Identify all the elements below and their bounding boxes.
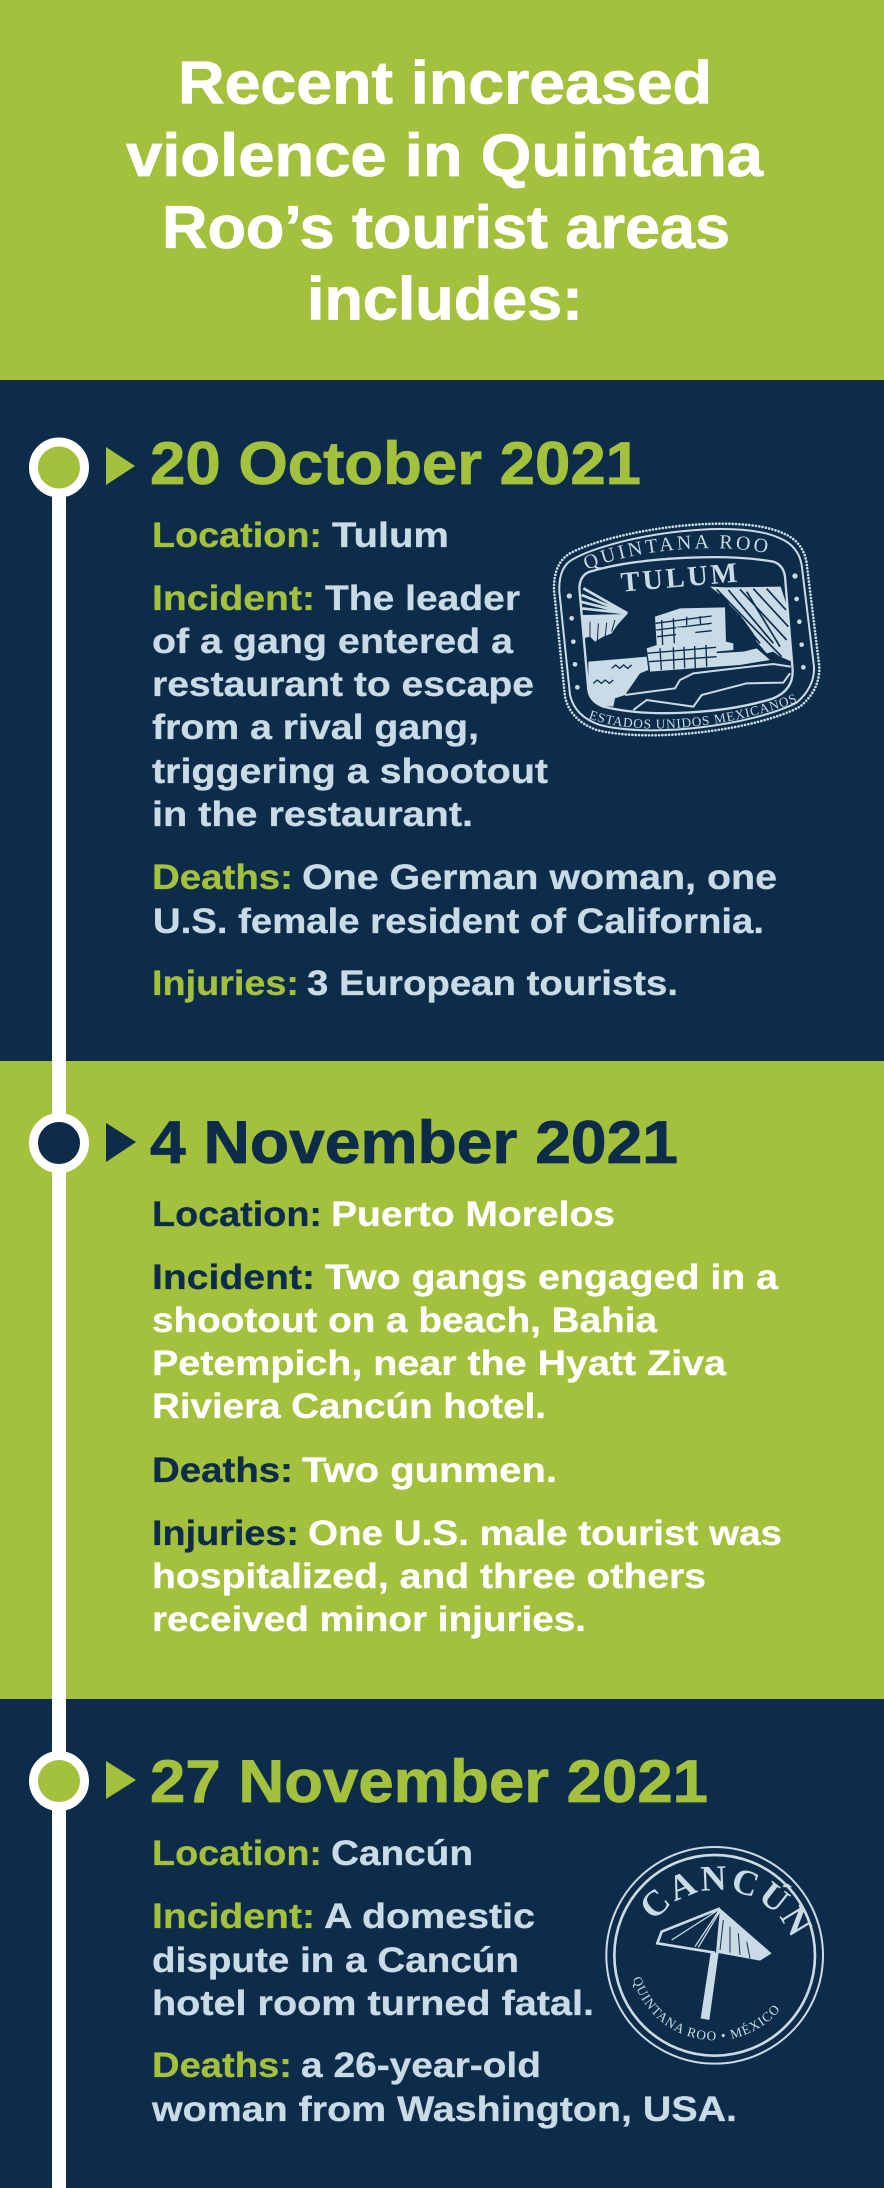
injuries: Injuries:: [152, 1514, 299, 1553]
incident: of a gang entered a: [152, 622, 514, 661]
incident: restaurant to escape: [152, 665, 534, 704]
title: Recent increased: [178, 50, 712, 116]
incident: [152, 1897, 594, 2023]
location: Puerto Morelos: [331, 1195, 615, 1234]
date heading: 4 November 2021: [150, 1109, 678, 1176]
location: Location:: [152, 516, 322, 555]
deaths: [152, 858, 777, 941]
incident: [152, 1258, 779, 1426]
icon: Cancun badge: QUINTANA ROO • MÉXICO: [633, 1977, 778, 2040]
injuries: One U.S. male tourist was: [308, 1514, 782, 1553]
injuries: Injuries:: [152, 964, 299, 1003]
node: 20 October: [34, 442, 135, 493]
icon: Tulum stamp: QUINTANA ROO: [584, 535, 768, 568]
incident: Two gangs engaged in a: [325, 1258, 779, 1297]
injuries: received minor injuries.: [152, 1600, 586, 1639]
incident: from a rival gang,: [152, 708, 479, 747]
panel: 4 November 2021: [0, 1061, 884, 1699]
incident: Incident:: [152, 1897, 315, 1936]
incident: triggering a shootout: [152, 752, 548, 791]
deaths: [152, 1451, 557, 1490]
incident: dispute in a Cancún: [152, 1941, 519, 1980]
incident: shootout on a beach, Bahia: [152, 1301, 658, 1340]
icon: Tulum stamp: [552, 522, 821, 737]
location: Location:: [152, 1195, 322, 1234]
deaths: One German woman, one: [302, 858, 777, 897]
location: Tulum: [332, 516, 449, 555]
panel: 20 October 2021: [150, 430, 821, 1003]
deaths: woman from Washington, USA.: [151, 2090, 737, 2129]
injuries: 3 European tourists.: [307, 964, 678, 1003]
location: Location:: [152, 1834, 322, 1873]
location: [152, 1195, 615, 1234]
icon: Cancun badge: [605, 1846, 824, 2065]
title: [126, 50, 764, 332]
icon: Cancun badge: CANCÚN: [642, 1866, 812, 1936]
injuries: hospitalized, and three others: [152, 1557, 706, 1596]
incident: hotel room turned fatal.: [152, 1984, 594, 2023]
deaths: Two gunmen.: [302, 1451, 557, 1490]
incident: [152, 579, 548, 834]
date heading: 20 October 2021: [150, 430, 641, 497]
incident: Riviera Cancún hotel.: [152, 1387, 546, 1426]
deaths: Deaths:: [152, 2046, 292, 2085]
title: includes:: [307, 266, 583, 332]
deaths: Deaths:: [152, 858, 293, 897]
injuries: [152, 1514, 782, 1639]
panel: header: [0, 0, 884, 380]
incident: Incident:: [152, 1258, 315, 1297]
injuries: [152, 964, 678, 1003]
timeline: [34, 442, 136, 2188]
incident: A domestic: [324, 1897, 535, 1936]
title: violence in Quintana: [126, 122, 764, 189]
location: Cancún: [331, 1834, 473, 1873]
incident: in the restaurant.: [152, 795, 473, 834]
deaths: a 26-year-old: [301, 2046, 541, 2085]
deaths: U.S. female resident of California.: [153, 902, 764, 941]
location: [152, 516, 449, 555]
incident: Incident:: [152, 579, 315, 618]
deaths: Deaths:: [152, 1451, 293, 1490]
location: [152, 1834, 473, 1873]
node: 27 November: [34, 1756, 136, 1806]
date heading: 27 November 2021: [150, 1748, 708, 1815]
incident: The leader: [325, 579, 520, 618]
icon: Tulum stamp: TULUM: [620, 558, 739, 599]
incident: Petempich, near the Hyatt Ziva: [152, 1344, 727, 1383]
node: 4 November: [34, 1118, 136, 1168]
panel: 27 November 2021: [150, 1748, 824, 2129]
title: Roo’s tourist areas: [162, 194, 730, 261]
icon: Tulum stamp: ESTADOS UNIDOS MEXICANOS: [588, 694, 796, 729]
deaths: [151, 2046, 737, 2129]
